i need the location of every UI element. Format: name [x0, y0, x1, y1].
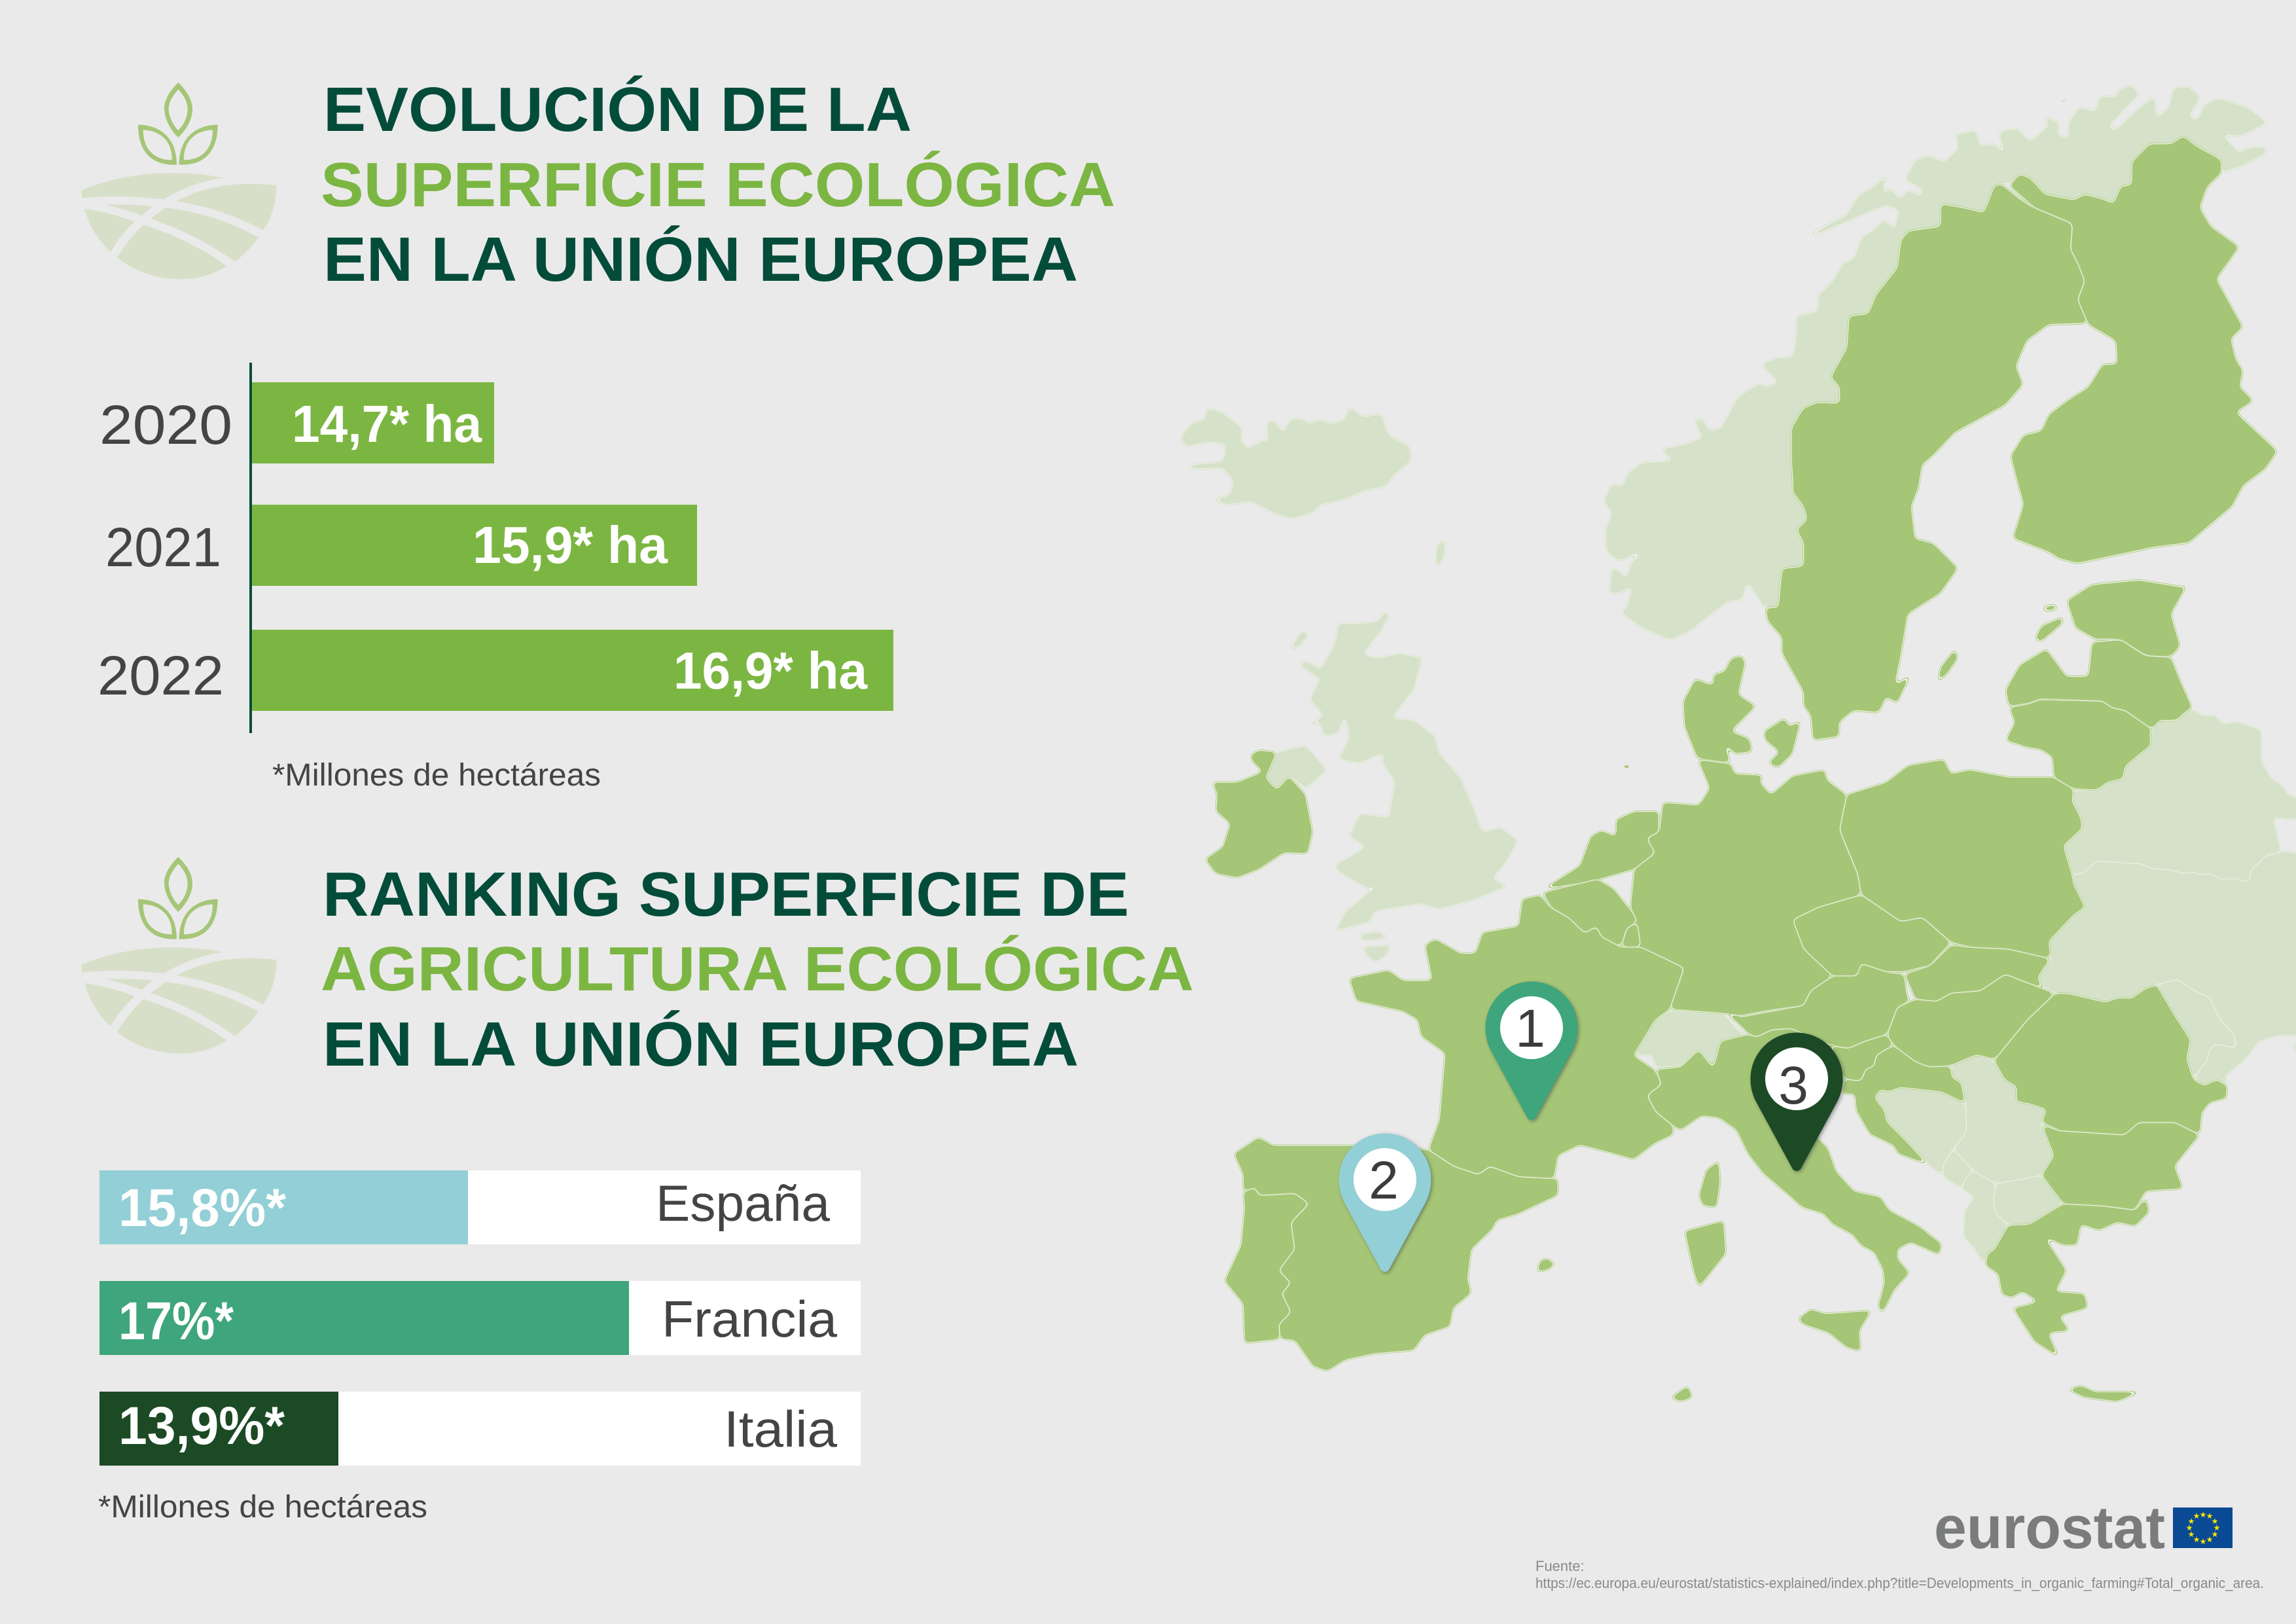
- Belgium: [1542, 879, 1638, 947]
- Slovakia: [1905, 945, 2055, 1001]
- map of Europe: [1179, 84, 2296, 1402]
- EU northern countries: [1624, 135, 2278, 768]
- icon: EU flag: [2173, 1507, 2233, 1548]
- Netherlands: [1544, 811, 1659, 888]
- icon: EU flag: ★: [2186, 1523, 2193, 1532]
- icon: EU flag: ★: [2200, 1510, 2206, 1519]
- Poland: [1839, 759, 2085, 958]
- bar 2021: [105, 505, 697, 586]
- Hungary: [1887, 974, 2055, 1067]
- Sweden: [1765, 184, 2089, 740]
- bar 2020: 2020: [99, 394, 232, 456]
- title: evolution: EVOLUCIÓN DE LA: [323, 75, 912, 145]
- Serbia: [1950, 1055, 2054, 1183]
- title: ranking: AGRICULTURA ECOLÓGICA: [321, 934, 1194, 1004]
- Crimea: [2291, 1040, 2296, 1054]
- title: ranking: EN LA UNIÓN EUROPEA: [323, 1009, 1079, 1079]
- Sicily: [1797, 1309, 1872, 1352]
- Saaremaa: [2034, 617, 2063, 641]
- bar 2021: 15,9* ha: [473, 516, 668, 574]
- Portugal: [1224, 1187, 1309, 1343]
- logo: eurostat: eurostat: [1934, 1494, 2165, 1561]
- Denmark Jutland: [1683, 655, 1757, 763]
- Norway: [1604, 84, 2269, 640]
- icon: plant and fields, bottom: [81, 857, 277, 1054]
- bar: Italia: [99, 1392, 861, 1466]
- bar: Italia: Italia: [724, 1400, 838, 1458]
- Great Britain: [1299, 611, 1518, 931]
- Croatia: [1842, 1045, 1965, 1167]
- Corsica: [1698, 1160, 1721, 1208]
- Switzerland: [1634, 1011, 1749, 1068]
- map pin 1: Francia: 1: [1515, 999, 1545, 1058]
- Greece: [1985, 1197, 2149, 1358]
- Iceland: [1179, 406, 1412, 519]
- Finland: [2009, 135, 2278, 564]
- bar: Italia: 13,9%*: [118, 1396, 285, 1456]
- map pin 2: España: [1339, 1134, 1431, 1272]
- North Macedonia: [1993, 1175, 2063, 1225]
- icon: EU flag: ★: [2212, 1517, 2218, 1526]
- source note: [1535, 1558, 2264, 1591]
- EU central and southern countries: [1205, 699, 2227, 1402]
- ranking bars: [99, 1170, 861, 1466]
- footnote: ranking: *Millones de hectáreas: [98, 1490, 427, 1525]
- map pin 1: Francia: [1486, 982, 1577, 1120]
- icon: EU flag: ★: [2193, 1511, 2200, 1521]
- title: evolution: SUPERFICIE ECOLÓGICA: [321, 150, 1115, 220]
- Hiiumaa: [2041, 604, 2058, 612]
- Estonia: [2067, 580, 2188, 657]
- Albania: [1962, 1170, 2008, 1265]
- Denmark Zealand: [1764, 717, 1801, 768]
- Slovenia: [1830, 1034, 1893, 1081]
- icon: EU flag: ★: [2214, 1523, 2220, 1532]
- Oland: [1937, 649, 1958, 683]
- France: [1349, 895, 1684, 1179]
- Bulgaria: [2041, 1122, 2200, 1210]
- title: ranking: RANKING SUPERFICIE DE: [323, 859, 1129, 929]
- icon: EU flag: ★: [2200, 1537, 2206, 1546]
- Montenegro: [1943, 1149, 1973, 1189]
- Spain: [1234, 1137, 1558, 1371]
- source note: Fuente:: [1535, 1558, 1585, 1574]
- bar: España: 15,8%*: [118, 1178, 286, 1238]
- Faroe island: [1435, 540, 1446, 567]
- bar: España: España: [656, 1174, 831, 1232]
- Austria: [1724, 964, 1914, 1049]
- Czechia: [1793, 895, 1951, 976]
- icon: EU flag: ★: [2193, 1535, 2200, 1544]
- bar 2021: 2021: [105, 516, 221, 578]
- bar: Francia: 17%*: [118, 1291, 234, 1351]
- bar: España: [99, 1170, 861, 1244]
- Romania: [1994, 984, 2227, 1135]
- Luxembourg: [1621, 922, 1641, 947]
- Ireland: [1205, 750, 1313, 878]
- Scottish island: [1289, 628, 1308, 651]
- bar 2022: 2022: [98, 645, 224, 706]
- Sardinia: [1684, 1220, 1726, 1288]
- bar chart: area by year: [98, 363, 893, 733]
- Ukraine: [2037, 852, 2296, 1085]
- map pin 3: Italia: 3: [1778, 1056, 1808, 1115]
- icon: plant and fields, top: [81, 82, 277, 280]
- bar: Francia: [99, 1281, 861, 1355]
- title: ranking: [321, 859, 1194, 1079]
- Lithuania: [2005, 699, 2153, 790]
- Latvia: [2005, 640, 2193, 729]
- Northern Ireland: [1265, 746, 1327, 789]
- icon: EU flag: ★: [2206, 1511, 2213, 1521]
- small island: [1624, 765, 1629, 768]
- Moldova: [2157, 979, 2237, 1079]
- Italy: [1647, 1029, 1942, 1314]
- map pin 3: Italia: [1750, 1033, 1843, 1171]
- icon: EU flag: ★: [2206, 1535, 2213, 1544]
- icon: EU flag: ★: [2188, 1517, 2195, 1526]
- source note: https://ec.europa.eu/eurostat/statistics-explained/index.php?title=Developments_in_organic_farming#Total_organic_area.: [1535, 1575, 2264, 1591]
- footnote: top chart: *Millones de hectáreas: [272, 758, 601, 793]
- Malta: [1670, 1385, 1693, 1402]
- title: evolution: EN LA UNIÓN EUROPEA: [323, 225, 1078, 295]
- Bosnia: [1874, 1088, 1966, 1176]
- bar 2022: 16,9* ha: [673, 641, 867, 700]
- Crete: [2067, 1385, 2142, 1402]
- Channel Islands south: [1361, 945, 1392, 963]
- Germany: [1621, 759, 1861, 1016]
- Balearic island: [1537, 1258, 1556, 1272]
- Belarus and Russia: [2064, 709, 2296, 882]
- map pin 2: España: 2: [1369, 1151, 1399, 1210]
- icon: EU flag: ★: [2188, 1530, 2195, 1539]
- title: evolution: [321, 75, 1115, 295]
- bar 2020: 14,7* ha: [292, 395, 482, 453]
- bar: Francia: Francia: [662, 1290, 838, 1348]
- bar 2022: [98, 630, 893, 711]
- non-EU northern countries and islands: [1179, 84, 2269, 651]
- bar 2020: [99, 382, 494, 463]
- Channel Islands: [1360, 931, 1390, 941]
- non-EU eastern and Balkan countries: [1265, 611, 2296, 1265]
- icon: EU flag: ★: [2212, 1530, 2218, 1539]
